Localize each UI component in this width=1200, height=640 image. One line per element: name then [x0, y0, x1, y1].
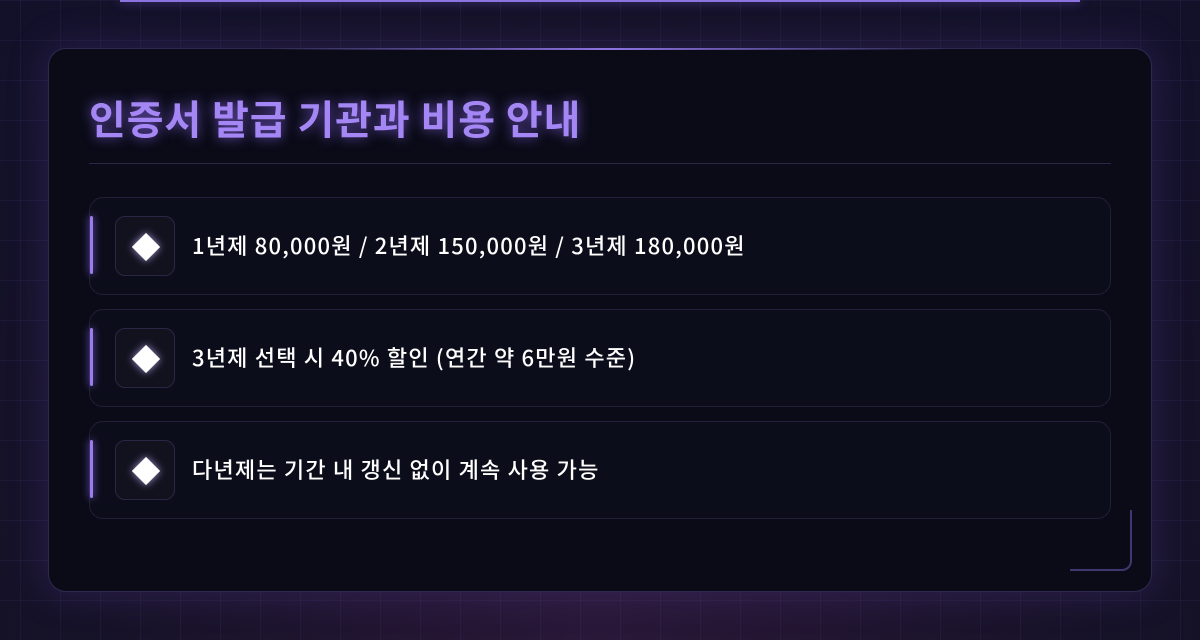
item: renewal: [89, 421, 1111, 519]
title: 인증서 발급 기관과 비용 안내: [89, 88, 581, 146]
item: pricing: [89, 197, 1111, 295]
text: discount: 3년제 선택 시 40% 할인 (연간 약 6만원 수준): [192, 341, 636, 373]
icon: diamond: [115, 216, 175, 276]
text: pricing: 1년제 80,000원 / 2년제 150,000원 / 3년제 180,000원: [192, 229, 746, 261]
text: renewal: 다년제는 기간 내 갱신 없이 계속 사용 가능: [192, 453, 600, 485]
icon: diamond: [115, 440, 175, 500]
icon: diamond: [115, 328, 175, 388]
panel: main card: [48, 48, 1152, 592]
item: discount: [89, 309, 1111, 407]
